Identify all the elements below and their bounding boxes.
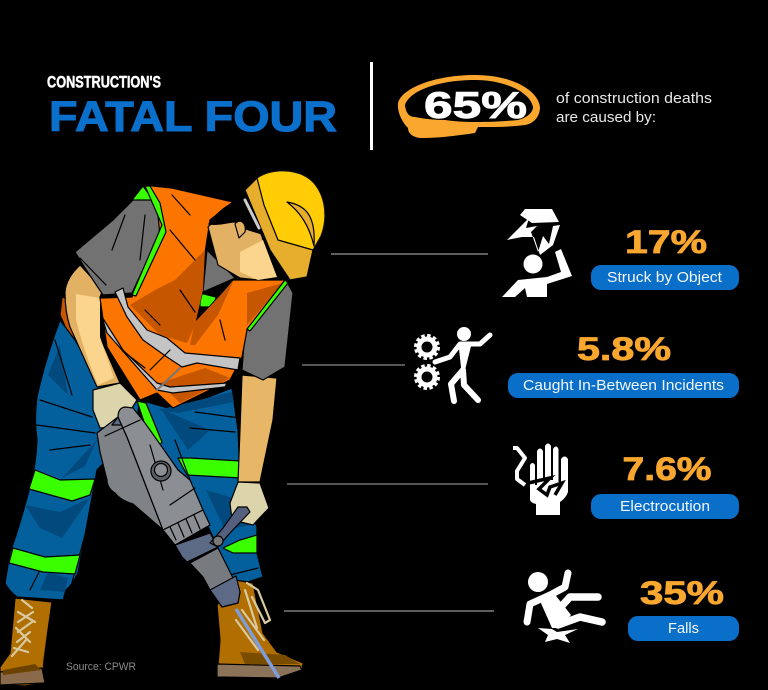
left sleeve bbox=[75, 193, 160, 295]
stat: caught in-between: Caught In-Between Incidents bbox=[523, 378, 724, 394]
stat: electrocution: Electrocution bbox=[620, 499, 710, 515]
left glove bbox=[93, 383, 137, 428]
head and neck bbox=[208, 200, 277, 280]
right arm bbox=[238, 375, 277, 482]
leader line 3 bbox=[287, 484, 488, 485]
65% callout: 65% bbox=[424, 85, 527, 126]
hard hat bbox=[245, 171, 325, 280]
leader line 2 bbox=[302, 364, 405, 366]
vest back strip bbox=[60, 297, 80, 342]
stat: electrocution bbox=[591, 451, 739, 519]
intro text: of construction deaths bbox=[556, 91, 712, 107]
intro text: are caused by: bbox=[556, 110, 656, 126]
icon: falling person bbox=[527, 572, 602, 643]
intro text bbox=[556, 91, 712, 126]
stat: caught in-between: 5.8% bbox=[577, 331, 671, 367]
stat: struck by object: Struck by Object bbox=[607, 270, 722, 286]
handle bbox=[210, 507, 250, 547]
right boot bbox=[217, 580, 303, 678]
leader line 1 bbox=[331, 254, 488, 255]
right glove bbox=[230, 482, 269, 525]
stat: struck by object bbox=[591, 224, 739, 290]
stat: falls: 35% bbox=[640, 575, 724, 611]
illustration: construction worker with jackhammer bbox=[0, 171, 325, 686]
left arm bbox=[65, 265, 120, 387]
icon: struck by object bbox=[502, 209, 572, 297]
icon: caught in-between bbox=[416, 327, 490, 401]
left trouser leg bbox=[5, 320, 140, 600]
reflective vest stripes bbox=[115, 288, 240, 370]
source: Source: CPWR bbox=[66, 661, 136, 673]
stat: struck by object: 17% bbox=[625, 224, 707, 260]
jackhammer bbox=[97, 407, 279, 678]
stat: falls: Falls bbox=[668, 621, 699, 637]
title bbox=[47, 74, 337, 141]
right sleeve bbox=[242, 282, 293, 380]
left boot bbox=[0, 598, 52, 686]
title: CONSTRUCTION'S bbox=[47, 74, 161, 92]
orange safety vest bbox=[100, 185, 285, 408]
green vest tail bbox=[137, 401, 162, 447]
stat: caught in-between bbox=[508, 331, 739, 398]
leader line 4 bbox=[284, 610, 494, 612]
stat: electrocution: 7.6% bbox=[622, 451, 712, 487]
title: FATAL FOUR bbox=[49, 93, 337, 141]
right trouser leg bbox=[140, 388, 263, 582]
chisel bit bbox=[236, 609, 279, 678]
shirt collar bbox=[203, 250, 235, 292]
65% callout bbox=[398, 75, 540, 138]
icon: electrocution hand bbox=[513, 444, 568, 515]
reflective leg bands bbox=[9, 458, 257, 574]
stat: falls bbox=[628, 575, 739, 641]
